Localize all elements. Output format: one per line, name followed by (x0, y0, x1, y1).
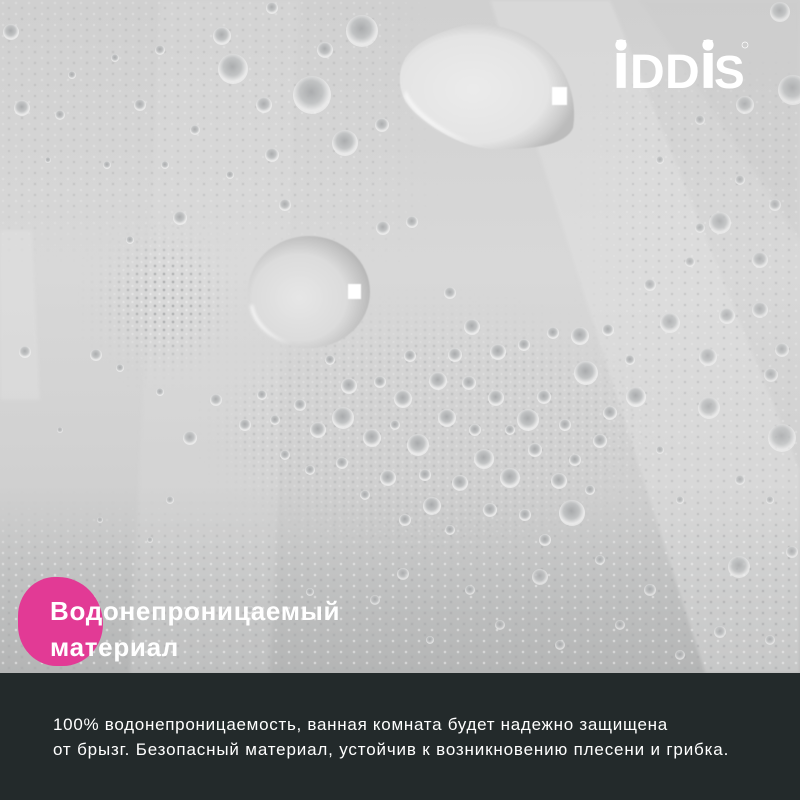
heading (50, 596, 340, 662)
droplets: right side and bottom (57, 2, 800, 660)
large water drop, middle (248, 236, 370, 348)
logo: IDDIS: D (665, 46, 700, 99)
logo: IDDIS (612, 30, 748, 100)
description text (53, 715, 729, 759)
heading: Водонепроницаемый (50, 596, 340, 626)
description text: 100% водонепроницаемость, ванная комната будет надежно защищена (53, 715, 668, 734)
description text: от брызг. Безопасный материал, устойчив к возникновению плесени и грибка. (53, 740, 729, 759)
droplets: central cluster (239, 319, 646, 546)
logo: IDDIS: D (630, 46, 665, 99)
footer bar with description (0, 673, 800, 800)
logo: IDDIS: S (714, 46, 745, 98)
heading: материал (50, 632, 179, 662)
large water drop, top (400, 24, 574, 149)
droplets: upper left (3, 2, 456, 445)
pink accent blob (18, 577, 103, 666)
